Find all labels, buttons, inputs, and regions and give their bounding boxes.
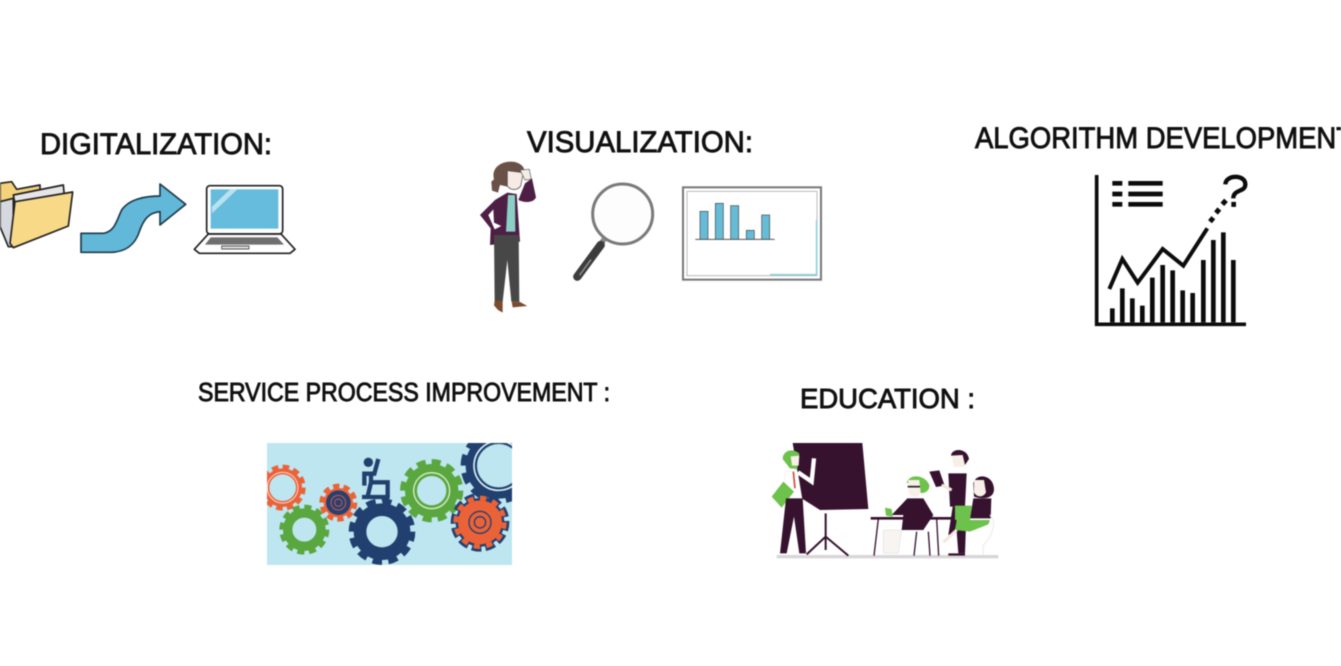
icon: green gear lower left [282,507,327,552]
icon: algorithm chart [1097,175,1246,324]
icon: table [871,518,960,556]
icon: presentation board [793,443,868,556]
icon: orange gear left [262,467,303,508]
panel: education illustration [772,443,998,558]
icon: green gear right [403,462,461,520]
panel: digitalization icons [0,182,295,253]
panel: visualization icons [480,162,821,313]
icon: navy gear top right [460,442,513,504]
heading: visualization: VISUALIZATION: [527,126,753,159]
icon: standing man with tablet [929,450,969,556]
icon: folder [0,182,73,248]
icon: laptop [194,186,295,253]
icon: whiteboard with bar chart [683,187,821,280]
heading: service process improvement: SERVICE PROCESS IMPROVEMENT : [198,377,610,407]
icon: seated woman with laptop [943,476,994,554]
heading: digitalization: DIGITALIZATION: [40,128,272,161]
icon: magnifying glass [577,184,653,277]
icon: teacher [772,450,814,553]
icon: curved arrow [81,184,186,252]
panel: service process gears image [266,442,513,566]
icon: climbing figure [362,458,390,497]
icon: big navy gear [351,501,413,562]
icon: small orange and navy gear [322,486,355,519]
icon: orange gear lower right [454,496,506,548]
heading: education: EDUCATION : [800,383,975,414]
icon: woman thinking [480,162,536,313]
icon: seated woman with glasses [883,476,933,553]
floor line [777,555,998,558]
